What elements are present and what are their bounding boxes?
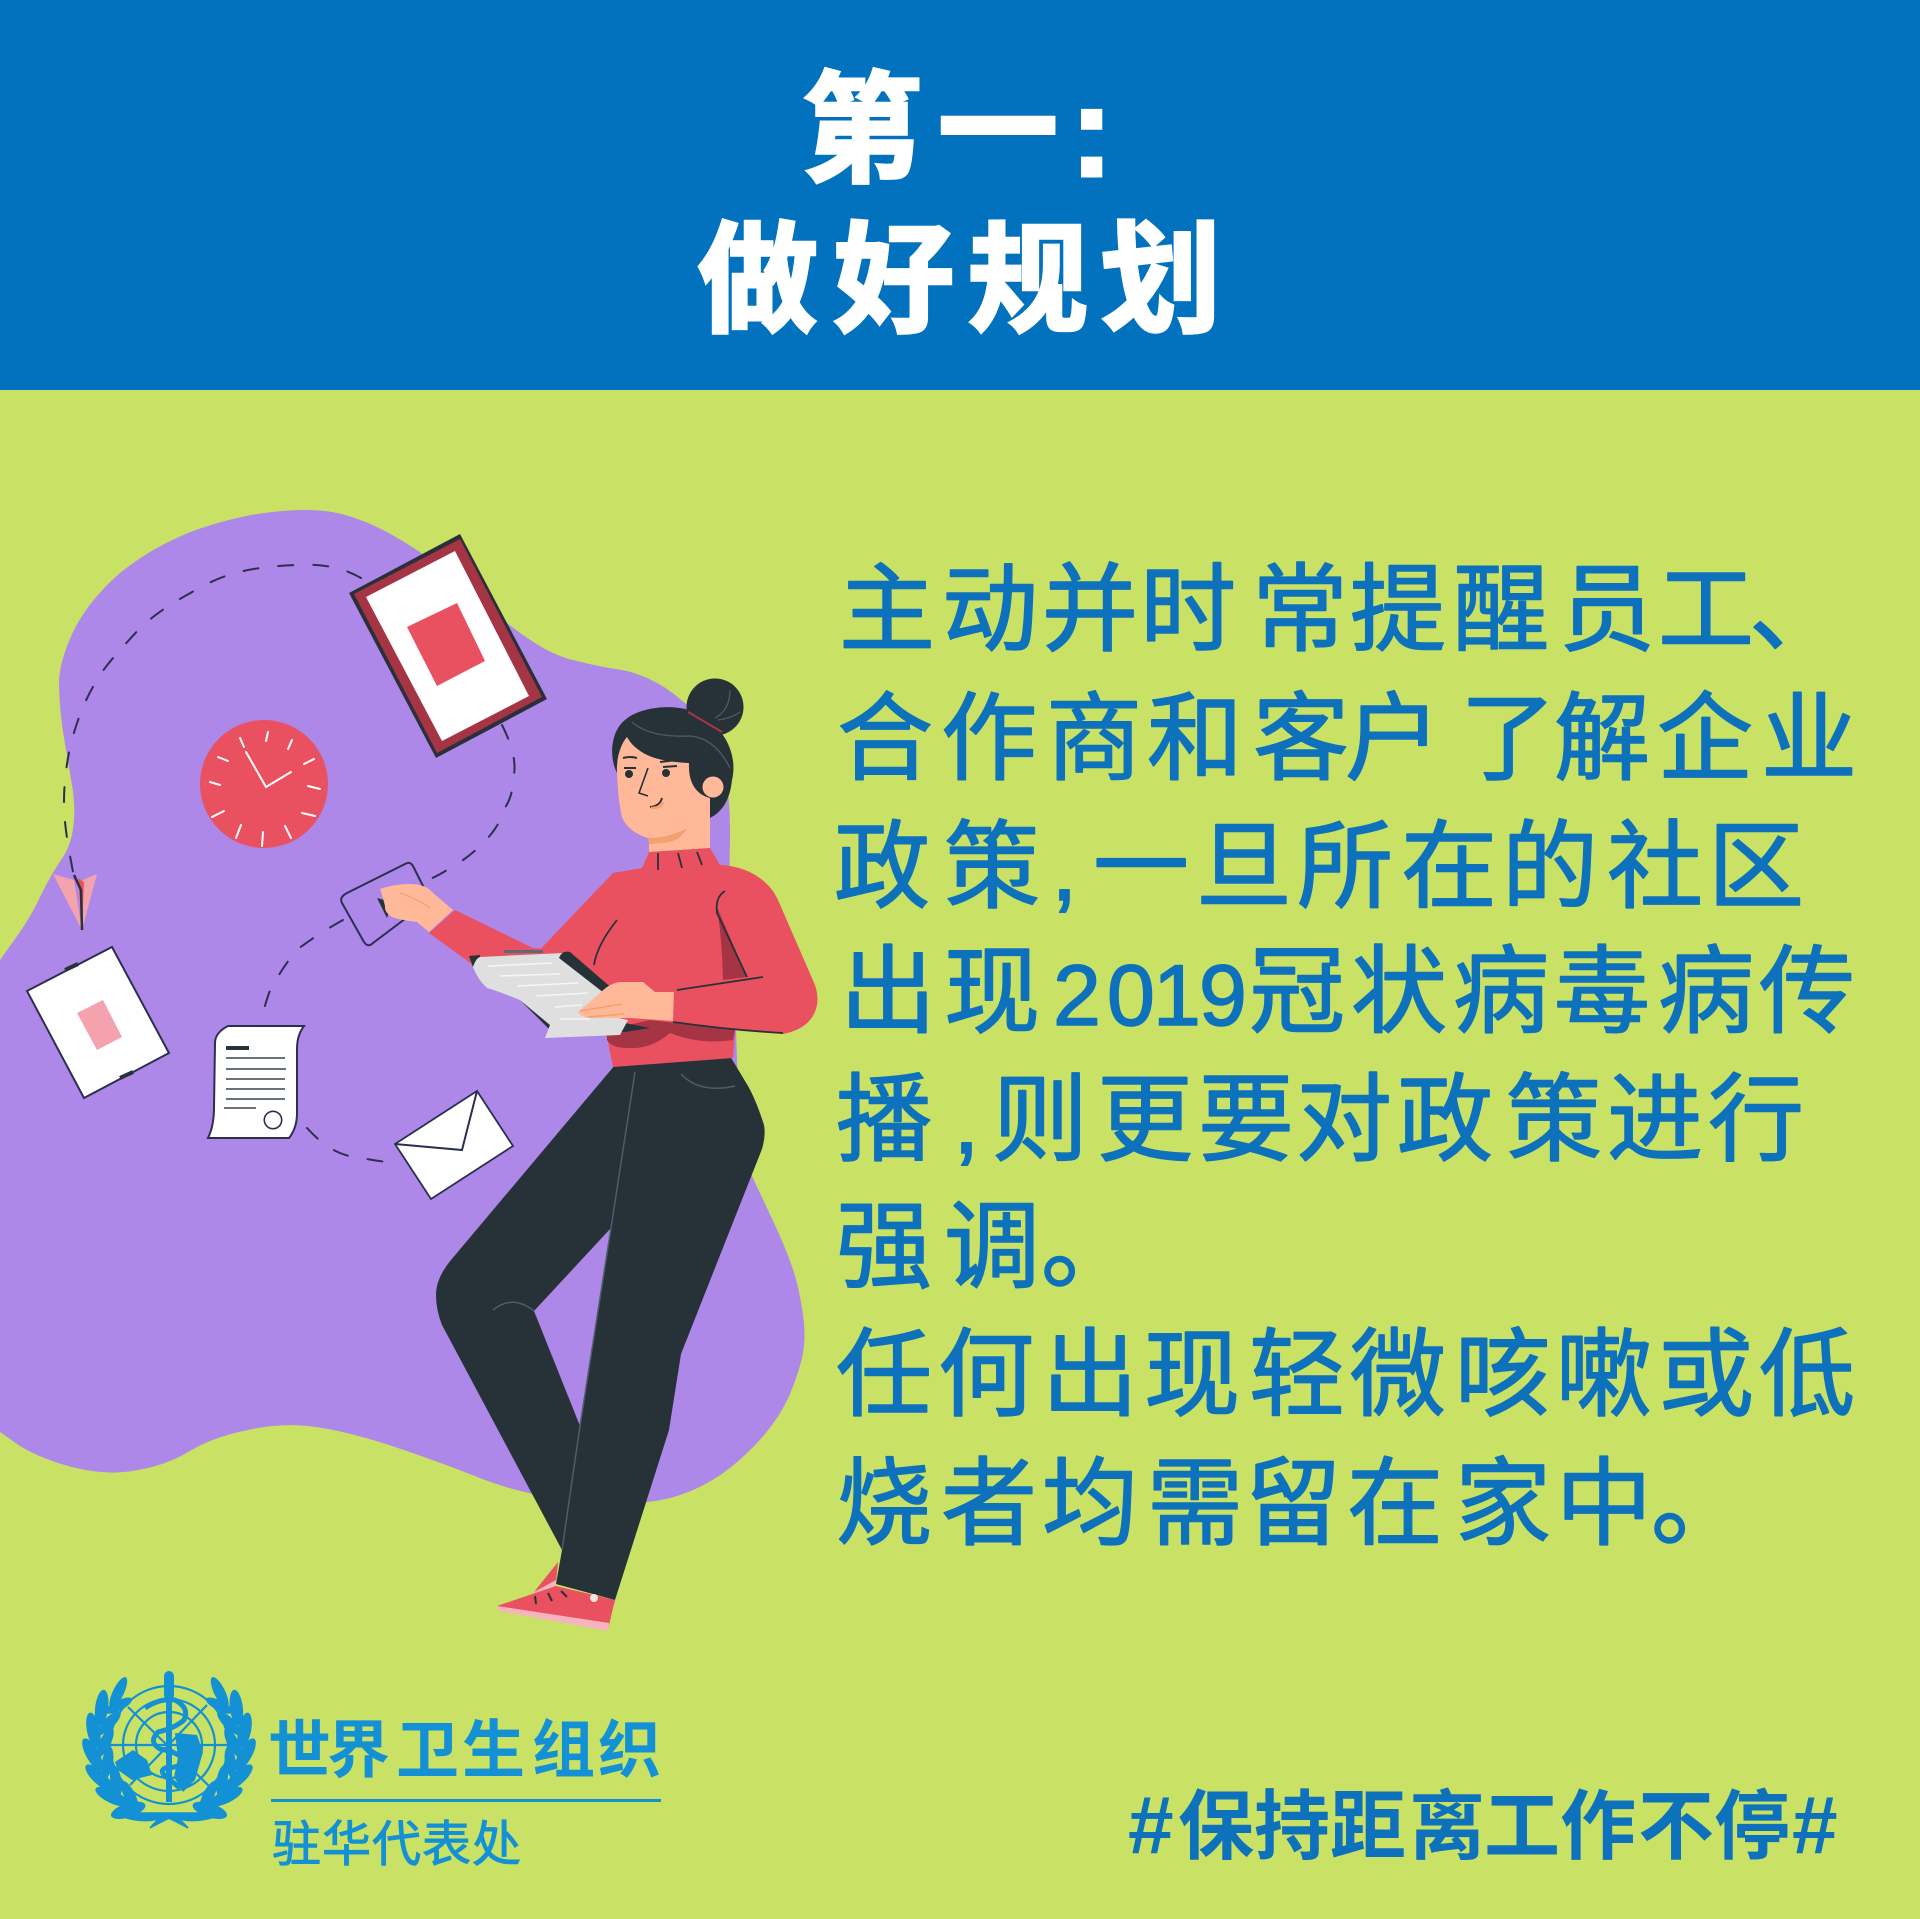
hashtag: 保持距离工作不停 [1178, 1785, 1790, 1870]
text line 1: 主动并时常提醒员工、 [839, 557, 1845, 664]
WHO logo emblem [78, 1675, 260, 1828]
WHO logo text [268, 1716, 661, 1872]
icon: paper plane [53, 874, 97, 930]
icon: small tablet [27, 947, 169, 1098]
text line 3: 政策,一旦所在的社区 [834, 814, 1804, 921]
sleeve and reaching hand [380, 884, 560, 965]
purple background blob [0, 510, 804, 1503]
text line 4: 冠状病毒病传 [1249, 939, 1855, 1046]
icon: wall clock [200, 720, 328, 848]
facial features [623, 757, 677, 808]
laurel right [191, 1675, 260, 1823]
organisation name: 世界卫生组织 [268, 1716, 661, 1786]
trousers [436, 1056, 765, 1600]
icon: document [208, 1026, 304, 1138]
office name: 驻华代表处 [272, 1818, 521, 1872]
title: 第一 [802, 64, 1058, 198]
header banner [0, 0, 1920, 390]
body text [834, 557, 1857, 1558]
clipboard with paper [469, 950, 650, 1038]
text line 5: 播,则更要对政策进行 [836, 1067, 1804, 1174]
title [698, 58, 1221, 348]
ribbon [113, 1813, 225, 1828]
text line 8: 烧者均需留在家中。 [836, 1451, 1747, 1558]
text line 4: 出现 [840, 939, 1040, 1046]
title: : [1070, 58, 1113, 204]
person illustration [380, 678, 817, 1631]
hashtag: # [1792, 1780, 1838, 1871]
hair and bun [612, 678, 744, 818]
text line 4: 2019 [1053, 948, 1247, 1044]
shoes [497, 1562, 615, 1631]
sweater [530, 848, 817, 1067]
dashed flight paths [64, 565, 514, 1163]
icon: envelope [395, 1091, 513, 1199]
staff and serpent [145, 1675, 186, 1802]
text line 2: 合作商和客户了解企业 [837, 686, 1857, 793]
text line 6: 强调。 [836, 1194, 1137, 1301]
laurel left [78, 1675, 147, 1823]
neck and face [617, 725, 712, 856]
icon: large framed picture [349, 534, 547, 758]
title: 做好规划 [698, 214, 1221, 348]
text line 7: 任何出现轻微咳嗽或低 [836, 1322, 1855, 1429]
globe grid [110, 1686, 228, 1804]
hand holding clipboard [578, 982, 674, 1021]
continents [115, 1733, 203, 1792]
hashtag: # [1128, 1780, 1174, 1871]
icon: touch card [341, 863, 430, 945]
